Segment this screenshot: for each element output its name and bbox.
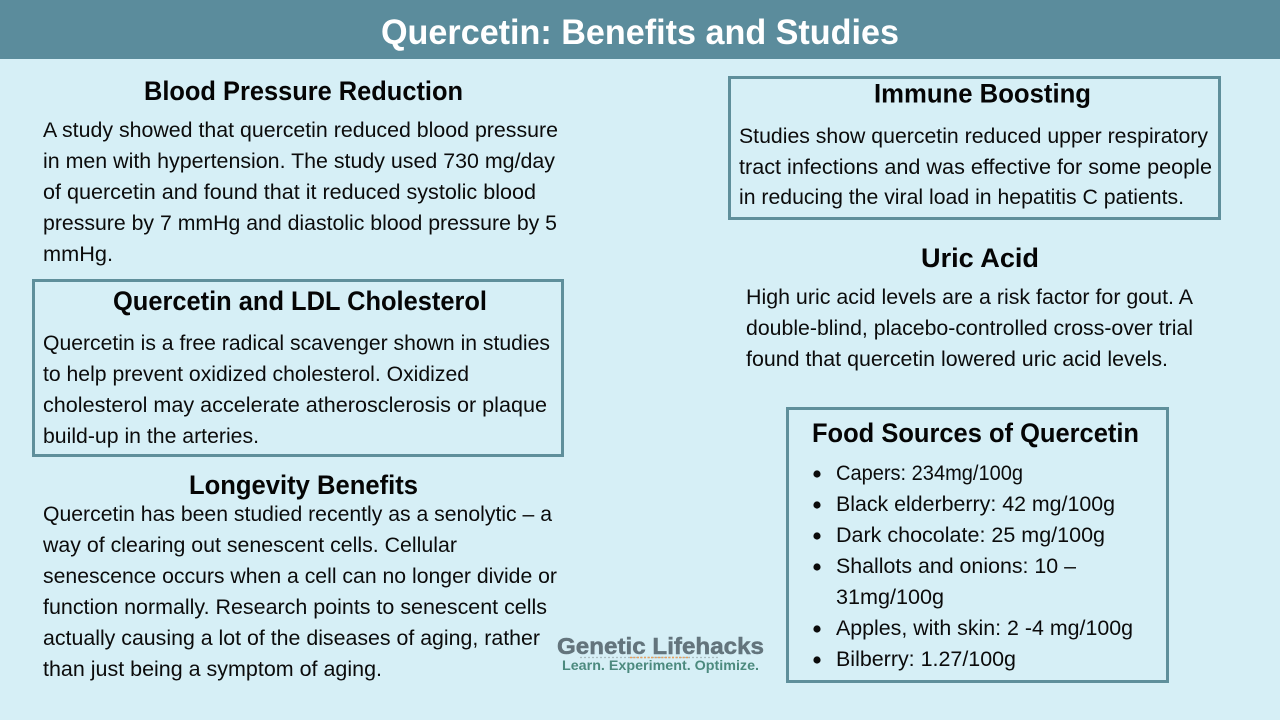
text block: blood pressure: [43, 118, 558, 266]
text block: blood pressure: in men with hypertension. The study used 730 mg/day: [43, 149, 555, 173]
text block: longevity: [42, 502, 557, 681]
text block: uric acid: High uric acid levels are a risk factor for gout. A: [746, 285, 1194, 309]
list: food sources: Black elderberry: 42 mg/100g: [836, 492, 1115, 516]
panel: blood pressure reduction: [43, 76, 558, 266]
text block: blood pressure: pressure by 7 mmHg and diastolic blood pressure by 5: [43, 211, 557, 235]
text block: longevity: than just being a symptom of aging.: [43, 657, 382, 681]
panel: LDL cholesterol: [34, 280, 562, 456]
text block: immune boosting: tract infections and was effective for some people: [739, 155, 1212, 179]
list: food sources: Dark chocolate: 25 mg/100g: [836, 523, 1105, 547]
logo: Genetic Lifehacks: [557, 633, 764, 673]
text block: LDL cholesterol: to help prevent oxidized cholesterol. Oxidized: [43, 362, 469, 386]
list: food sources: [813, 461, 1133, 671]
list: food sources: Capers: 234mg/100g: [836, 461, 1023, 485]
text block: immune boosting: [739, 124, 1212, 209]
text block: immune boosting: in reducing the viral load in hepatitis C patients.: [739, 185, 1184, 209]
text block: LDL cholesterol: Quercetin is a free radical scavenger shown in studies: [43, 331, 550, 355]
text block: blood pressure: A study showed that quercetin reduced blood pressure: [43, 118, 558, 142]
title banner: Quercetin: Benefits and Studies: [381, 13, 899, 52]
text block: blood pressure: mmHg.: [43, 242, 113, 266]
list: food sources: 31mg/100g: [836, 585, 944, 609]
text block: LDL cholesterol: build-up in the arteries.: [43, 424, 259, 448]
logo: Genetic Lifehacks: Genetic Lifehacks: [557, 633, 764, 659]
text block: blood pressure: of quercetin and found that it reduced systolic blood: [43, 180, 536, 204]
list: food sources: Bilberry: 1.27/100g: [836, 647, 1016, 671]
text block: LDL cholesterol: [43, 331, 550, 448]
text block: longevity: function normally. Research points to senescent cells: [43, 595, 547, 619]
list: food sources: Apples, with skin: 2 -4 mg/100g: [836, 616, 1133, 640]
panel: uric acid: [746, 243, 1194, 371]
heading: LDL cholesterol: Quercetin and LDL Cholesterol: [113, 286, 487, 316]
heading: blood pressure: Blood Pressure Reduction: [144, 76, 463, 106]
logo: Genetic Lifehacks: Learn. Experiment. Optimize.: [562, 658, 759, 673]
heading: uric acid: Uric Acid: [921, 243, 1039, 273]
text block: uric acid: found that quercetin lowered uric acid levels.: [746, 347, 1168, 371]
text block: longevity: actually causing a lot of the diseases of aging, rather: [43, 626, 540, 650]
panel: longevity benefits: [42, 470, 557, 681]
panel: immune boosting: [730, 78, 1220, 218]
text block: longevity: Quercetin has been studied recently as a senolytic – a: [43, 502, 552, 526]
text block: longevity: senescence occurs when a cell can no longer divide or: [43, 564, 557, 588]
text block: uric acid: [746, 285, 1194, 371]
text block: longevity: way of clearing out senescent cells. Cellular: [42, 533, 457, 557]
text block: LDL cholesterol: cholesterol may accelerate atherosclerosis or plaque: [43, 393, 547, 417]
heading: immune boosting: Immune Boosting: [874, 79, 1091, 109]
title banner: [0, 0, 1280, 59]
heading: food sources: Food Sources of Quercetin: [812, 418, 1139, 448]
list: food sources: Shallots and onions: 10 –: [836, 554, 1076, 578]
heading: longevity: Longevity Benefits: [189, 470, 418, 500]
text block: immune boosting: Studies show quercetin reduced upper respiratory: [739, 124, 1208, 148]
panel: food sources: [788, 408, 1168, 682]
text block: uric acid: double-blind, placebo-controlled cross-over trial: [746, 316, 1193, 340]
